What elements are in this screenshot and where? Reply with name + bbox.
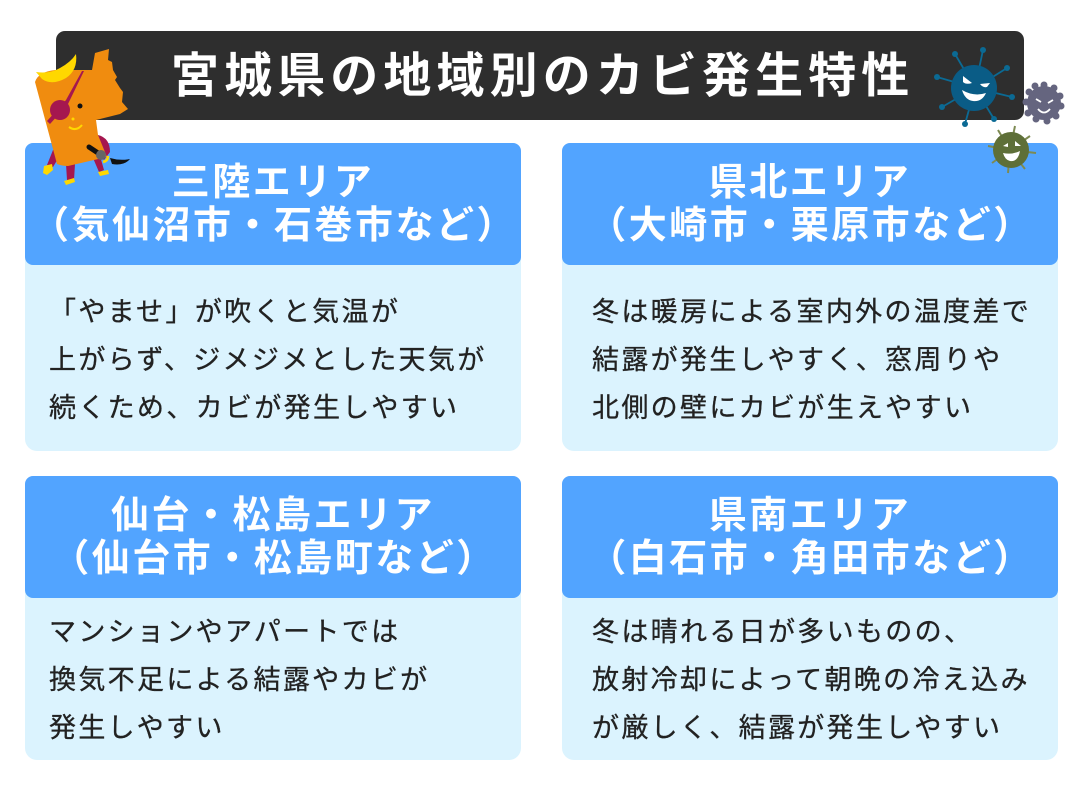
heading: 県南エリア: 県南エリア <box>709 495 911 537</box>
icon: green virus <box>988 126 1036 174</box>
heading: 三陸エリア <box>25 143 521 265</box>
panel: 仙台・松島エリア <box>25 476 521 760</box>
heading: 三陸エリア: （気仙沼市・石巻市など） <box>31 205 517 247</box>
text: 三陸エリア description: 上がらず、ジメジメとした天気が <box>49 345 487 375</box>
icon: grey virus <box>1022 82 1064 124</box>
icon: blue virus <box>934 47 1015 127</box>
text: 県南エリア description <box>562 592 1058 760</box>
heading: 仙台・松島エリア: 仙台・松島エリア <box>111 495 435 537</box>
text: 三陸エリア description <box>25 259 521 451</box>
text: 県南エリア description: が厳しく、結露が発生しやすい <box>592 713 1002 743</box>
text: 県北エリア description: 北側の壁にカビが生えやすい <box>592 393 973 423</box>
heading: 三陸エリア: 三陸エリア <box>172 162 374 204</box>
text: 仙台・松島エリア description: マンションやアパートでは <box>49 617 400 647</box>
text: 仙台・松島エリア description: 換気不足による結露やカビが <box>49 665 429 695</box>
heading: 仙台・松島エリア <box>25 476 521 598</box>
panel: 三陸エリア <box>25 143 521 451</box>
heading: 県南エリア: （白石市・角田市など） <box>588 538 1034 580</box>
text: 仙台・松島エリア description <box>25 592 521 760</box>
text: 県北エリア description: 結露が発生しやすく、窓周りや <box>592 345 1002 375</box>
panel: 県北エリア <box>562 143 1058 451</box>
panel: 県南エリア <box>562 476 1058 760</box>
text: 三陸エリア description: 「やませ」が吹くと気温が <box>49 297 400 327</box>
text: 県南エリア description: 放射冷却によって朝晩の冷え込み <box>592 665 1030 695</box>
text: 仙台・松島エリア description: 発生しやすい <box>49 713 225 743</box>
icon: orange Miyagi mascot with eyepatch <box>35 49 130 185</box>
heading: 県北エリア: （大崎市・栗原市など） <box>588 205 1034 247</box>
text: 県北エリア description <box>562 259 1058 451</box>
text: 三陸エリア description: 続くため、カビが発生しやすい <box>49 393 459 423</box>
heading: 仙台・松島エリア: （仙台市・松島町など） <box>51 538 497 580</box>
title: 宮城県の地域別のカビ発生特性 <box>171 50 914 103</box>
title bar <box>56 31 1024 120</box>
heading: 県南エリア <box>562 476 1058 598</box>
heading: 県北エリア <box>562 143 1058 265</box>
text: 県北エリア description: 冬は暖房による室内外の温度差で <box>592 297 1031 327</box>
text: 県南エリア description: 冬は晴れる日が多いものの、 <box>592 617 973 647</box>
heading: 県北エリア: 県北エリア <box>709 162 911 204</box>
